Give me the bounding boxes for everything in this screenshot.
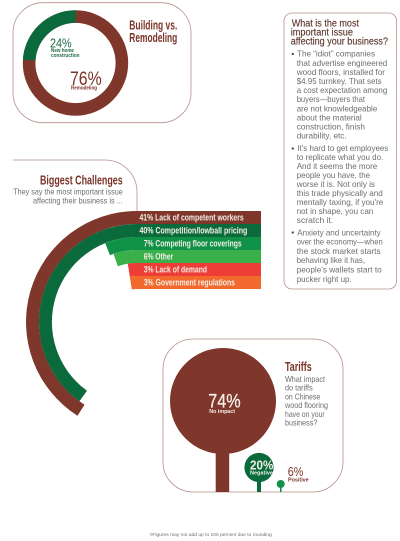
bullet list: behaving like it has, xyxy=(297,255,365,265)
bullet list: Anxiety and uncertainty xyxy=(297,227,381,237)
label: 24 percent new home construction xyxy=(50,35,80,59)
tree: no impact xyxy=(170,348,276,492)
heading: tariffs: Tariffs xyxy=(285,360,312,374)
bullet list: this trade physically and xyxy=(297,188,383,198)
tariffs question: on Chinese xyxy=(285,391,321,401)
tree: positive xyxy=(277,480,285,492)
bullet list: And it seems the more xyxy=(297,161,378,171)
panel heading: What is the most xyxy=(292,19,359,30)
label: 24 percent new home construction: construction xyxy=(51,53,80,59)
bullet list: The “idiot” companies xyxy=(297,49,375,59)
bar: other: 6% Other xyxy=(144,252,174,262)
bullet list: mentally taxing, if you're xyxy=(297,197,384,207)
label: 24 percent new home construction: 24% xyxy=(50,35,72,50)
footnote: ◊Figures may not add up to 100 percent due to rounding xyxy=(150,532,272,537)
bullet list: not in shape, you can xyxy=(297,206,374,216)
panel: biggest challenges xyxy=(13,160,261,416)
label: 6 percent positive: Positive xyxy=(288,478,309,484)
subheading: They say the most important issue xyxy=(13,186,123,196)
panel: tariffs xyxy=(163,339,343,492)
tree: negative: Negative xyxy=(250,470,273,476)
label: 76 percent remodeling: 76% xyxy=(70,69,102,90)
bullet list: about the material xyxy=(297,112,362,122)
panel heading: affecting your business? xyxy=(291,37,388,48)
tariffs question xyxy=(284,374,328,428)
tariffs question: do tariffs xyxy=(285,383,313,393)
radial bar chart xyxy=(26,211,137,416)
bullet list: wood floors, installed for xyxy=(296,67,385,77)
heading: building vs remodeling: Remodeling xyxy=(129,31,177,45)
subheading xyxy=(13,186,123,205)
bullet list: It's hard to get employees xyxy=(297,143,388,153)
bar: lack of competent workers xyxy=(137,211,261,224)
tariffs question: What impact xyxy=(285,374,326,384)
bullet list: to replicate what you do. xyxy=(297,152,383,162)
bullet list: a cost expectation among xyxy=(297,85,388,95)
bullet list: over the economy—when xyxy=(297,237,383,247)
bar: competing floor coverings: 7% Competing floor coverings xyxy=(144,239,242,249)
donut chart xyxy=(29,17,122,109)
bullet list: buyers—buyers that xyxy=(297,94,366,104)
label: 6 percent positive xyxy=(288,465,309,484)
tariffs question: business? xyxy=(285,418,318,428)
subheading: affecting their business is ... xyxy=(33,195,123,205)
tree: no impact: 74% xyxy=(208,391,241,412)
bullet list: worse it is. Not only is xyxy=(296,179,375,189)
bullet list: pucker right up. xyxy=(297,274,352,284)
bullet list: people you have, the xyxy=(297,170,370,180)
heading: biggest challenges: Biggest Challenges xyxy=(40,172,123,187)
panel: most important issue xyxy=(284,13,397,289)
bullet list xyxy=(292,49,388,284)
tree: negative xyxy=(244,453,274,492)
bar: other xyxy=(137,250,261,263)
bullet list: are not knowledgeable xyxy=(297,103,378,113)
heading: building vs remodeling xyxy=(129,19,177,45)
tariffs question: have on your xyxy=(285,409,325,419)
bullet list: that advertise engineered xyxy=(297,58,388,68)
bar: competing floor coverings xyxy=(137,237,261,250)
bar: government regulations: 3% Government regulations xyxy=(144,278,235,288)
bar: lack of competent workers: 41% Lack of competent workers xyxy=(140,212,244,222)
tree: negative: 20% xyxy=(250,458,273,472)
tree: no impact: No impact xyxy=(209,409,235,415)
panel heading: important issue xyxy=(291,28,354,38)
panel heading xyxy=(291,19,388,48)
bar: lack of demand xyxy=(137,263,261,276)
bar: competition and lowball pricing xyxy=(137,224,261,237)
tariffs question: wood flooring xyxy=(284,400,328,410)
heading: building vs remodeling: Building vs. xyxy=(129,19,177,33)
label: 76 percent remodeling: Remodeling xyxy=(71,86,97,92)
bullet list: the stock market starts xyxy=(297,246,381,256)
bullet list: $4.95 turnkey. That sets xyxy=(297,76,382,86)
panel: building vs remodeling xyxy=(13,3,191,123)
label: 24 percent new home construction: New home xyxy=(51,48,74,54)
bar: lack of demand: 3% Lack of demand xyxy=(144,265,207,275)
bullet list: durability, etc. xyxy=(297,131,347,141)
bullet list: construction, finish xyxy=(297,122,365,132)
bullet list: scratch it. xyxy=(297,215,333,225)
bar: competition and lowball pricing: 40% Competition/lowball pricing xyxy=(140,226,247,236)
label: 6 percent positive: 6% xyxy=(288,465,303,479)
bullet list: people's wallets start to xyxy=(297,264,382,274)
